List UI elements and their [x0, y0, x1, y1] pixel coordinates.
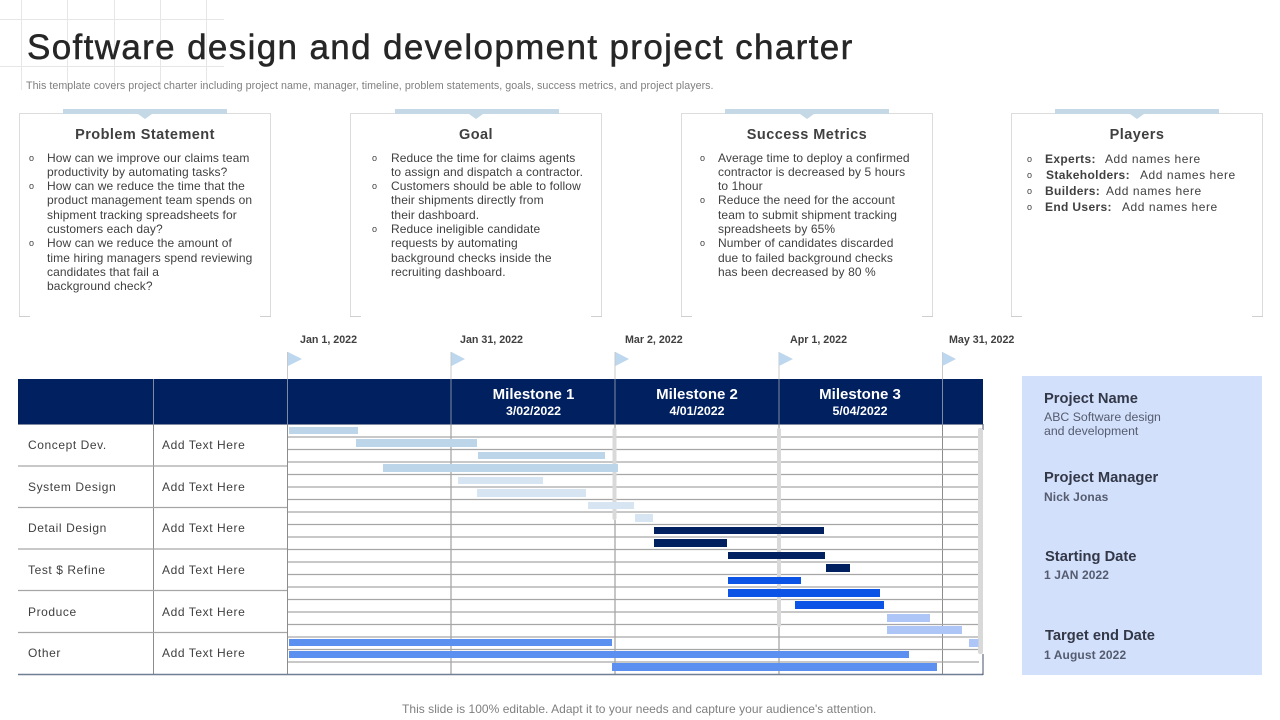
problem statement text: time hiring managers spend reviewing — [47, 251, 252, 265]
date: apr 1: Apr 1, 2022 — [790, 334, 847, 346]
players text: End Users: — [1045, 200, 1112, 214]
success metrics text: contractor is decreased by 5 hours — [718, 165, 905, 179]
milestone 2: Milestone 2 — [656, 386, 738, 403]
players text: Add names here — [1122, 200, 1218, 214]
row: other: Other — [28, 646, 61, 660]
project manager: Project Manager — [1044, 470, 1158, 486]
players text: Add names here — [1105, 152, 1201, 166]
decorative grid top left — [0, 0, 224, 90]
milestone 3 — [819, 386, 901, 418]
row: other — [28, 646, 245, 660]
panel: problem statement — [19, 109, 271, 317]
goal text: requests by automating — [391, 236, 518, 250]
project name value: ABC Software design — [1044, 410, 1161, 424]
problem statement text: candidates that fail a — [47, 265, 159, 279]
timeline flags — [288, 352, 956, 379]
success metrics text: due to failed background checks — [718, 251, 893, 265]
players text: Add names here — [1140, 168, 1236, 182]
bullet markers: o — [700, 152, 705, 162]
row: system design: System Design — [28, 480, 116, 494]
date: jan 31: Jan 31, 2022 — [460, 334, 523, 346]
row: produce: Add Text Here — [162, 605, 245, 619]
problem statement text: How can we improve our claims team — [47, 150, 249, 164]
problem statement text: product management team spends on — [47, 193, 252, 207]
goal text — [391, 150, 583, 279]
heading: success metrics: Success Metrics — [747, 127, 867, 143]
problem statement text — [47, 150, 252, 293]
bullet markers: o — [1027, 154, 1032, 164]
gantt grid lines — [18, 379, 983, 675]
milestone markers — [612, 428, 983, 654]
milestone 1: 3/02/2022 — [506, 404, 561, 418]
milestone 1 — [493, 386, 574, 418]
bullet markers: o — [29, 152, 34, 162]
date: may 31: May 31, 2022 — [949, 334, 1014, 346]
row: concept dev: Add Text Here — [162, 438, 245, 452]
players text — [1045, 152, 1236, 214]
bullet markers: o — [700, 238, 705, 248]
bars: system design — [458, 477, 653, 522]
row: detail design — [28, 521, 245, 535]
panel: project details — [1022, 376, 1262, 675]
success metrics text: has been decreased by 80 % — [718, 265, 876, 279]
bullet markers: o — [29, 238, 34, 248]
bars: test and refine — [728, 577, 884, 609]
title: Software design and development project charter — [27, 28, 854, 67]
bullet markers: o — [1027, 202, 1032, 212]
problem statement text: background check? — [47, 279, 153, 293]
starting date value: 1 JAN 2022 — [1044, 568, 1109, 582]
starting date: Starting Date — [1045, 549, 1136, 565]
players text: Stakeholders: — [1046, 168, 1130, 182]
success metrics text: Number of candidates discarded — [718, 236, 893, 250]
milestone 2: 4/01/2022 — [669, 404, 725, 418]
problem statement text: How can we reduce the amount of — [47, 236, 232, 250]
row: other: Add Text Here — [162, 646, 245, 660]
row: detail design: Detail Design — [28, 521, 107, 535]
players text: Experts: — [1045, 152, 1096, 166]
row: test and refine: Test $ Refine — [28, 563, 106, 577]
date: jan 1: Jan 1, 2022 — [300, 334, 357, 346]
goal text: their shipments directly from — [391, 193, 544, 207]
panel: goal — [350, 109, 602, 317]
success metrics text: team to submit shipment tracking — [718, 208, 897, 222]
bars: produce — [887, 614, 978, 647]
row: detail design: Add Text Here — [162, 521, 245, 535]
bullet markers — [1027, 154, 1032, 212]
row: concept dev — [28, 438, 245, 452]
row: test and refine — [28, 563, 245, 577]
project name value: and development — [1044, 424, 1138, 438]
row: system design: Add Text Here — [162, 480, 245, 494]
heading: goal: Goal — [459, 127, 493, 143]
success metrics text: to 1hour — [718, 179, 763, 193]
success metrics text: Average time to deploy a confirmed — [718, 150, 910, 164]
milestone 3: 5/04/2022 — [832, 404, 888, 418]
goal text: background checks inside the — [391, 251, 552, 265]
milestone 1: Milestone 1 — [493, 386, 574, 403]
bars: detail design — [654, 527, 850, 572]
gantt chart grid and bars — [18, 352, 984, 676]
table header band — [18, 379, 983, 424]
bullet markers: o — [1027, 186, 1032, 196]
project name: Project Name — [1044, 391, 1138, 407]
row: system design — [28, 480, 245, 494]
problem statement text: shipment tracking spreadsheets for — [47, 208, 237, 222]
goal text: Reduce the time for claims agents — [391, 150, 575, 164]
row: produce: Produce — [28, 605, 77, 619]
goal text: their dashboard. — [391, 208, 479, 222]
success metrics text — [718, 150, 910, 279]
date: mar 2: Mar 2, 2022 — [625, 334, 683, 346]
panel: players — [1011, 109, 1263, 317]
bullet markers — [700, 152, 705, 248]
bullet markers — [29, 152, 34, 248]
goal text: Reduce ineligible candidate — [391, 222, 540, 236]
project manager value: Nick Jonas — [1044, 490, 1108, 504]
bullet markers: o — [29, 181, 34, 191]
row: produce — [28, 605, 245, 619]
problem statement text: customers each day? — [47, 222, 163, 236]
bullet markers: o — [372, 152, 377, 162]
players text: Builders: — [1045, 184, 1100, 198]
row: concept dev: Concept Dev. — [28, 438, 107, 452]
goal text: to assign and dispatch a contractor. — [391, 165, 583, 179]
row: test and refine: Add Text Here — [162, 563, 245, 577]
target end date: Target end Date — [1045, 628, 1155, 644]
problem statement text: How can we reduce the time that the — [47, 179, 245, 193]
project name value — [1044, 410, 1161, 438]
success metrics text: Reduce the need for the account — [718, 193, 895, 207]
bullet markers: o — [700, 195, 705, 205]
target end date value: 1 August 2022 — [1044, 648, 1126, 662]
panel: success metrics — [681, 109, 933, 317]
subtitle: This template covers project charter including project name, manager, timeline, problem statements, goals, success metrics, and project players. — [26, 80, 714, 92]
bullet markers: o — [1027, 170, 1032, 180]
milestone 3: Milestone 3 — [819, 386, 901, 403]
milestone 2 — [656, 386, 738, 418]
problem statement text: productivity by automating tasks? — [47, 165, 227, 179]
goal text: Customers should be able to follow — [391, 179, 581, 193]
players text: Add names here — [1106, 184, 1202, 198]
footer note: This slide is 100% editable. Adapt it to your needs and capture your audience's attention. — [402, 702, 876, 716]
heading: problem statement: Problem Statement — [75, 127, 215, 143]
bars: other — [289, 639, 937, 671]
goal text: recruiting dashboard. — [391, 265, 506, 279]
success metrics text: spreadsheets by 65% — [718, 222, 835, 236]
bullet markers — [372, 152, 377, 234]
heading: players: Players — [1110, 127, 1164, 143]
bullet markers: o — [372, 181, 377, 191]
bars: concept development — [289, 427, 618, 472]
bullet markers: o — [372, 224, 377, 234]
